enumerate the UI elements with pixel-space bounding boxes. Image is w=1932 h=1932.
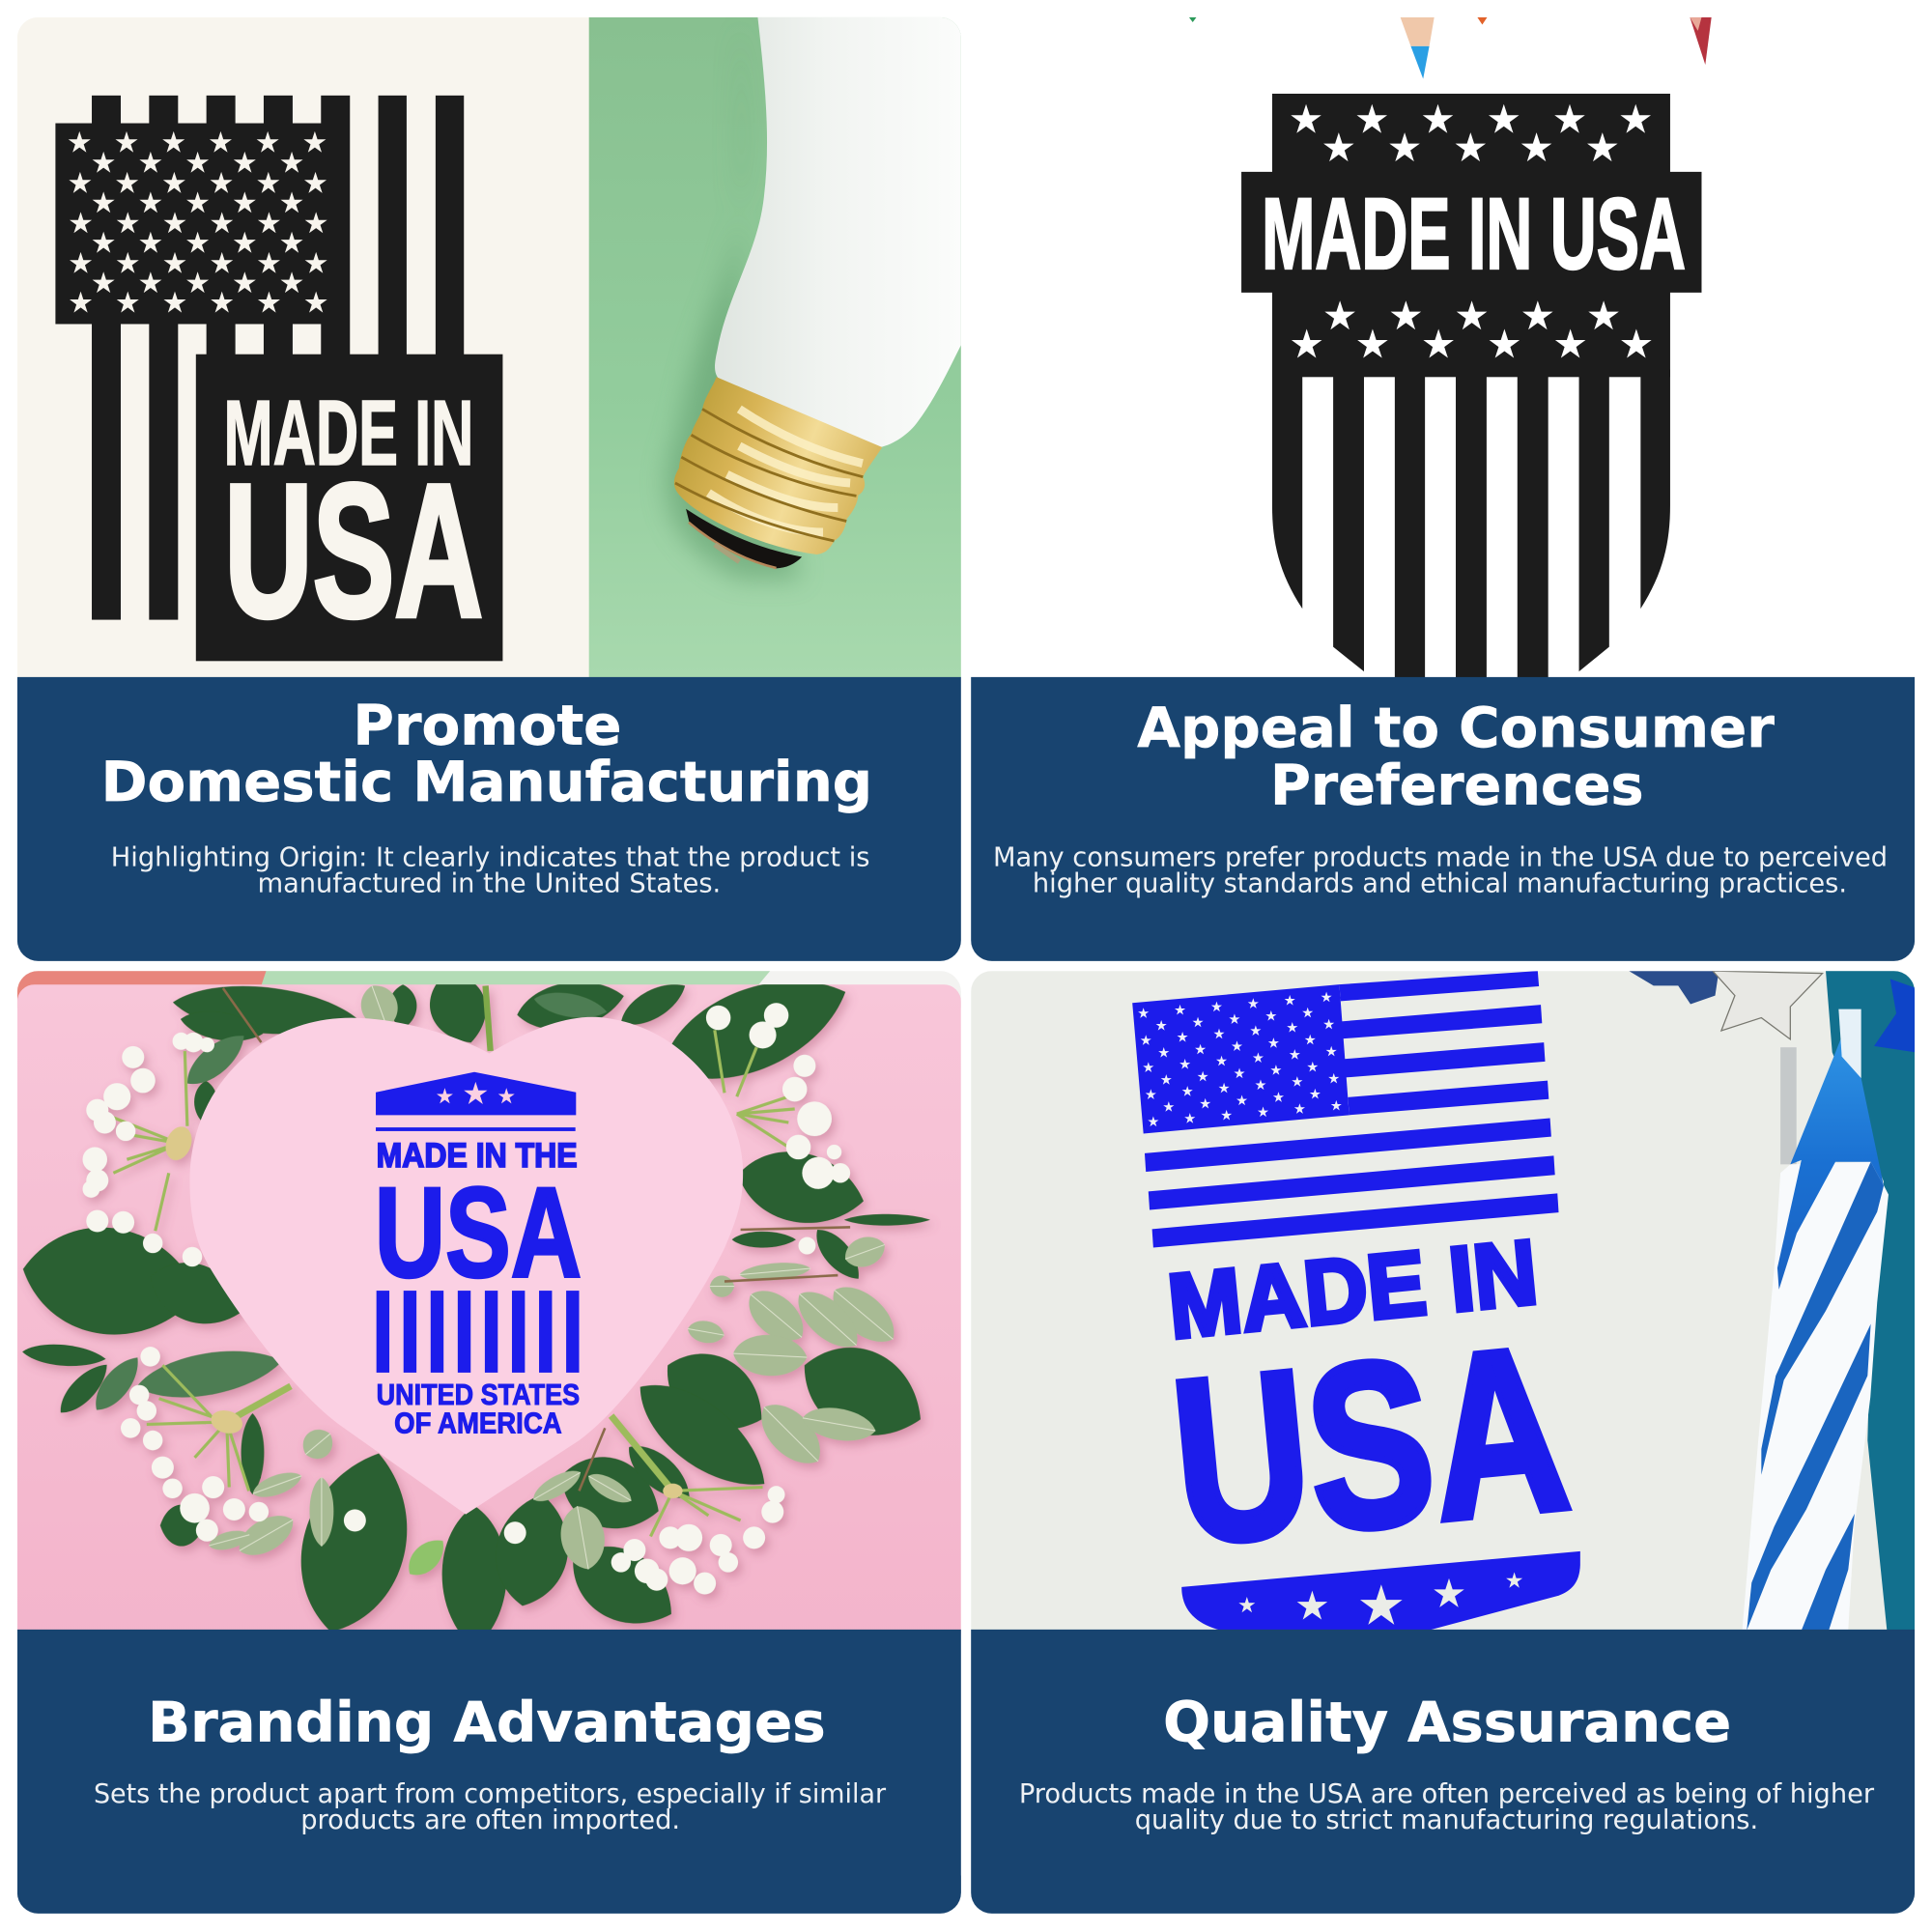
heading: Quality Assurance <box>1163 1690 1731 1754</box>
description: products are often imported. <box>300 1805 680 1835</box>
leaf: bright green bud <box>409 1540 446 1583</box>
heading: Branding Advantages <box>148 1690 826 1754</box>
logo: made in USA flag with stars <box>55 96 502 661</box>
text: USA: USA <box>224 444 483 657</box>
leaves: mid green <box>87 987 609 1418</box>
description <box>113 846 869 893</box>
description: Sets the product apart from competitors, especially if similar <box>94 1779 887 1809</box>
flower collars <box>161 1123 683 1498</box>
text: made in the: MADE IN THE <box>377 1137 578 1175</box>
text: made in USA: MADE IN USA <box>1262 178 1686 291</box>
icon: light bulb <box>674 17 961 568</box>
logo: made in USA blue flag <box>1132 971 1580 1631</box>
text: USA: USA <box>1163 1297 1577 1594</box>
description: Products made in the USA are often perceived as being of higher <box>1019 1779 1875 1809</box>
leaves: dark green <box>15 954 938 1649</box>
text: made in: MADE IN <box>224 382 473 485</box>
heading: Preferences <box>1270 753 1644 817</box>
photo: paper with candle and stars <box>971 970 1915 1631</box>
panel: branding advantages <box>15 954 979 1915</box>
photo: white background <box>971 17 1915 678</box>
icon: blue star ornament <box>1629 971 1719 1005</box>
photo: pink background with leaves and flowers <box>15 954 961 1650</box>
description <box>1019 1779 1875 1835</box>
flowers: white clusters <box>82 1003 850 1595</box>
heading: Domestic Manufacturing <box>101 750 872 814</box>
icon: striped candle <box>1743 1009 1889 1631</box>
description <box>993 843 1888 898</box>
panel: quality assurance <box>971 970 1915 1915</box>
caption panel <box>17 1630 961 1915</box>
caption panel <box>971 677 1915 962</box>
stems: brown <box>223 988 850 1491</box>
description <box>94 1779 887 1835</box>
heading: Appeal to Consumer <box>1137 696 1775 760</box>
pencil mark <box>1780 1047 1797 1164</box>
text: of america: OF AMERICA <box>394 1406 562 1439</box>
heading <box>106 703 868 813</box>
shape: pink heart <box>189 1017 743 1515</box>
icon: blue paper star <box>1874 979 1915 1052</box>
logo: made in the USA <box>375 1072 582 1439</box>
heading <box>1137 704 1775 806</box>
banner with stars <box>1181 1551 1580 1631</box>
description: Highlighting Origin: It clearly indicates that the product is <box>111 843 870 873</box>
description: Many consumers prefer products made in the USA due to perceived <box>993 843 1888 873</box>
text: made in: MADE IN <box>1164 1222 1542 1358</box>
description: quality due to strict manufacturing regulations. <box>1135 1805 1758 1835</box>
text: USA: USA <box>375 1161 582 1304</box>
strip at top of photo <box>17 971 979 1008</box>
caption panel <box>17 677 961 962</box>
logo: made in USA shield <box>1241 94 1701 678</box>
text: united states: UNITED STATES <box>377 1378 580 1411</box>
icon: coloured pencils <box>1189 17 1712 79</box>
photo: cream paper and green background <box>17 17 961 678</box>
caption panel <box>971 1630 1915 1915</box>
icon: silver star <box>1713 971 1822 1039</box>
leaves: sage <box>207 980 905 1573</box>
panel: promote domestic manufacturing <box>17 17 961 962</box>
description: higher quality standards and ethical manufacturing practices. <box>1033 868 1847 898</box>
description: manufactured in the United States. <box>258 868 721 898</box>
heading: Promote <box>353 693 621 757</box>
panel: appeal to consumer preferences <box>971 17 1915 962</box>
stems <box>113 985 795 1537</box>
